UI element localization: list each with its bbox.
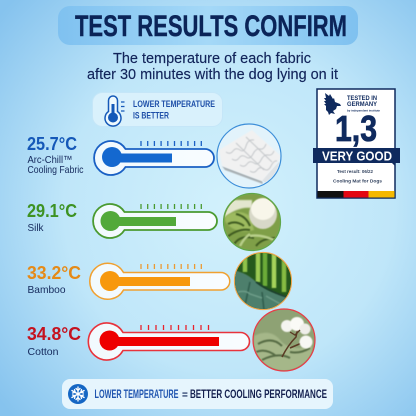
German flag strip bbox=[318, 191, 394, 198]
footer text bbox=[94, 387, 327, 401]
row: Bamboo bbox=[27, 252, 292, 312]
value: 25.7°C bbox=[27, 134, 77, 154]
thermometer bbox=[93, 204, 217, 238]
subtitle: The temperature of each fabric bbox=[113, 50, 311, 67]
icon: snowflake bbox=[68, 384, 88, 404]
thermometer bbox=[90, 263, 230, 299]
icon: eagle bbox=[324, 93, 341, 115]
label: Bamboo bbox=[28, 284, 66, 296]
thermometer bbox=[94, 141, 214, 175]
rating band: VERY GOOD bbox=[322, 150, 392, 164]
legend: lower temperature is better bbox=[92, 92, 222, 126]
test details: Test result: 06/22 bbox=[337, 169, 373, 174]
label: Arc-Chill™ bbox=[28, 154, 72, 166]
tested in Germany text: TESTED IN bbox=[347, 95, 377, 102]
value: 33.2°C bbox=[27, 263, 81, 283]
row: Cotton bbox=[27, 309, 315, 374]
test details: Cooling Mat for Dogs bbox=[333, 178, 382, 184]
image: quilted cooling mat bbox=[217, 124, 283, 188]
subtitle: after 30 minutes with the dog lying on it bbox=[87, 66, 339, 83]
test details bbox=[333, 169, 382, 184]
value: 29.1°C bbox=[27, 201, 77, 221]
label: Silk bbox=[28, 222, 44, 234]
value: 34.8°C bbox=[27, 324, 81, 344]
tested in Germany text bbox=[347, 95, 380, 112]
row: Silk bbox=[27, 192, 282, 252]
image: bamboo and green fabric bbox=[232, 252, 292, 312]
footer text: = bbox=[182, 390, 188, 401]
footer text: LOWER TEMPERATURE bbox=[94, 387, 178, 401]
tested in Germany text: by independent institute bbox=[347, 108, 380, 112]
image: cotton boll and fabric bbox=[252, 309, 315, 374]
icon: thermometer bbox=[105, 96, 124, 126]
thermometer bbox=[88, 323, 250, 360]
footer callout bbox=[62, 379, 333, 409]
tested in Germany text: GERMANY bbox=[347, 101, 378, 108]
badge: tested in Germany 1,3 very good bbox=[313, 89, 400, 198]
legend text: LOWER TEMPERATURE bbox=[133, 99, 215, 110]
score: 1,3 bbox=[335, 108, 377, 149]
label bbox=[28, 154, 84, 176]
footer text: BETTER COOLING PERFORMANCE bbox=[190, 387, 327, 401]
image: green silk and cocoon bowl bbox=[222, 192, 282, 252]
legend text bbox=[133, 99, 215, 122]
label: Cotton bbox=[28, 346, 59, 358]
row: Arc-Chill bbox=[27, 124, 283, 188]
title bbox=[58, 6, 358, 45]
label: Cooling Fabric bbox=[28, 164, 84, 176]
legend text: IS BETTER bbox=[133, 110, 169, 122]
subtitle bbox=[87, 50, 339, 83]
